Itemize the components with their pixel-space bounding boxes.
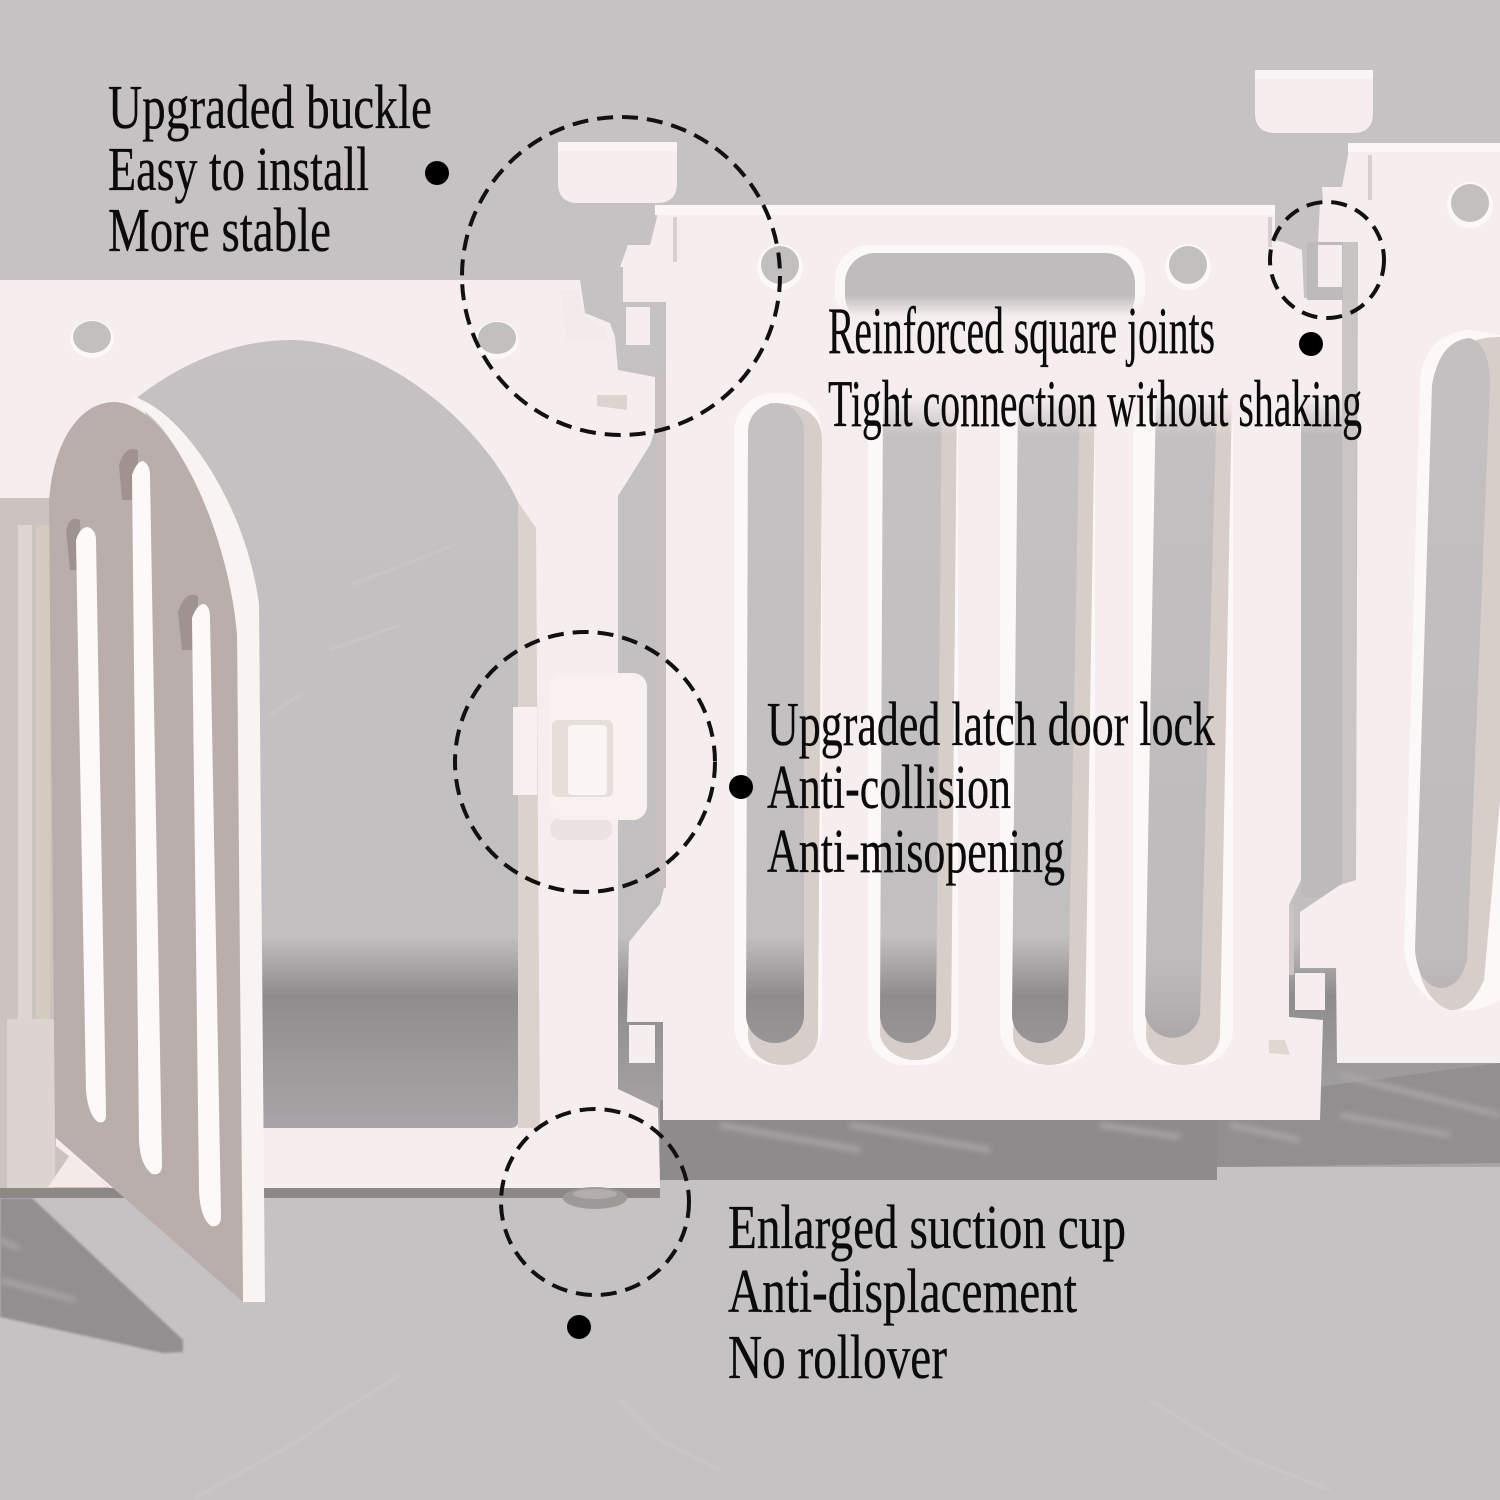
mounting hole (1447, 182, 1493, 228)
square peg (1307, 242, 1358, 302)
callout circle: suction cup (501, 1109, 689, 1295)
text block: upgraded latch door lock: Anti-misopening (767, 818, 1065, 886)
marker dot: latch (729, 775, 753, 799)
stepped joint detail (560, 290, 627, 410)
callout circle: latch (455, 632, 715, 892)
latch door lock (513, 673, 647, 840)
marker dot: square joint (1299, 332, 1323, 356)
arch opening (138, 340, 518, 1128)
text block: enlarged suction cup: Anti-displacement (728, 1258, 1077, 1326)
text block: upgraded latch door lock (767, 691, 1215, 886)
gate mounting holes (70, 320, 519, 359)
text backing fade (826, 295, 1342, 435)
text block: reinforced square joints: Reinforced square joints (828, 294, 1215, 368)
text block: upgraded buckle: More stable (108, 197, 331, 265)
marker dot: buckle (425, 161, 449, 185)
icon: detached buckle cap centre (558, 142, 677, 203)
panel: centre gate panel (620, 205, 1356, 1120)
mounting holes (757, 244, 1211, 290)
text block: upgraded buckle (108, 74, 432, 265)
vertical slots (734, 300, 1356, 1065)
text block: upgraded latch door lock: Upgraded latch door lock (767, 691, 1215, 759)
floor shadow (0, 1198, 183, 1353)
door slots (66, 449, 221, 1226)
lower joint (629, 905, 1325, 1063)
slot (1404, 330, 1500, 1010)
text block: upgraded latch door lock: Anti-collision (767, 754, 1011, 822)
arch scratches (270, 545, 455, 715)
marble veins (195, 1375, 1330, 1498)
marker dot: suction cup (567, 1315, 591, 1339)
back panel shadow (0, 498, 110, 1188)
text block: enlarged suction cup: Enlarged suction cup (728, 1194, 1126, 1262)
callout circle: square joint (1270, 202, 1384, 318)
text block: reinforced square joints (828, 294, 1362, 441)
text block: upgraded buckle: Upgraded buckle (108, 74, 432, 142)
door face (49, 402, 243, 1302)
suction cup (563, 1187, 627, 1209)
panel: left gate panel (0, 280, 660, 1188)
door side edge (129, 397, 265, 1302)
arch inner wall (518, 502, 540, 1128)
text block: upgraded buckle: Easy to install (108, 136, 369, 204)
callout circle: buckle (462, 117, 780, 435)
panel: right gate panel (1300, 143, 1500, 1063)
text block: enlarged suction cup (728, 1194, 1126, 1392)
text block: enlarged suction cup: No rollover (728, 1324, 947, 1392)
square peg (626, 307, 650, 345)
icon: detached buckle cap right (1255, 70, 1373, 133)
panel: open door leaf (0, 397, 265, 1302)
top window (835, 245, 1145, 325)
